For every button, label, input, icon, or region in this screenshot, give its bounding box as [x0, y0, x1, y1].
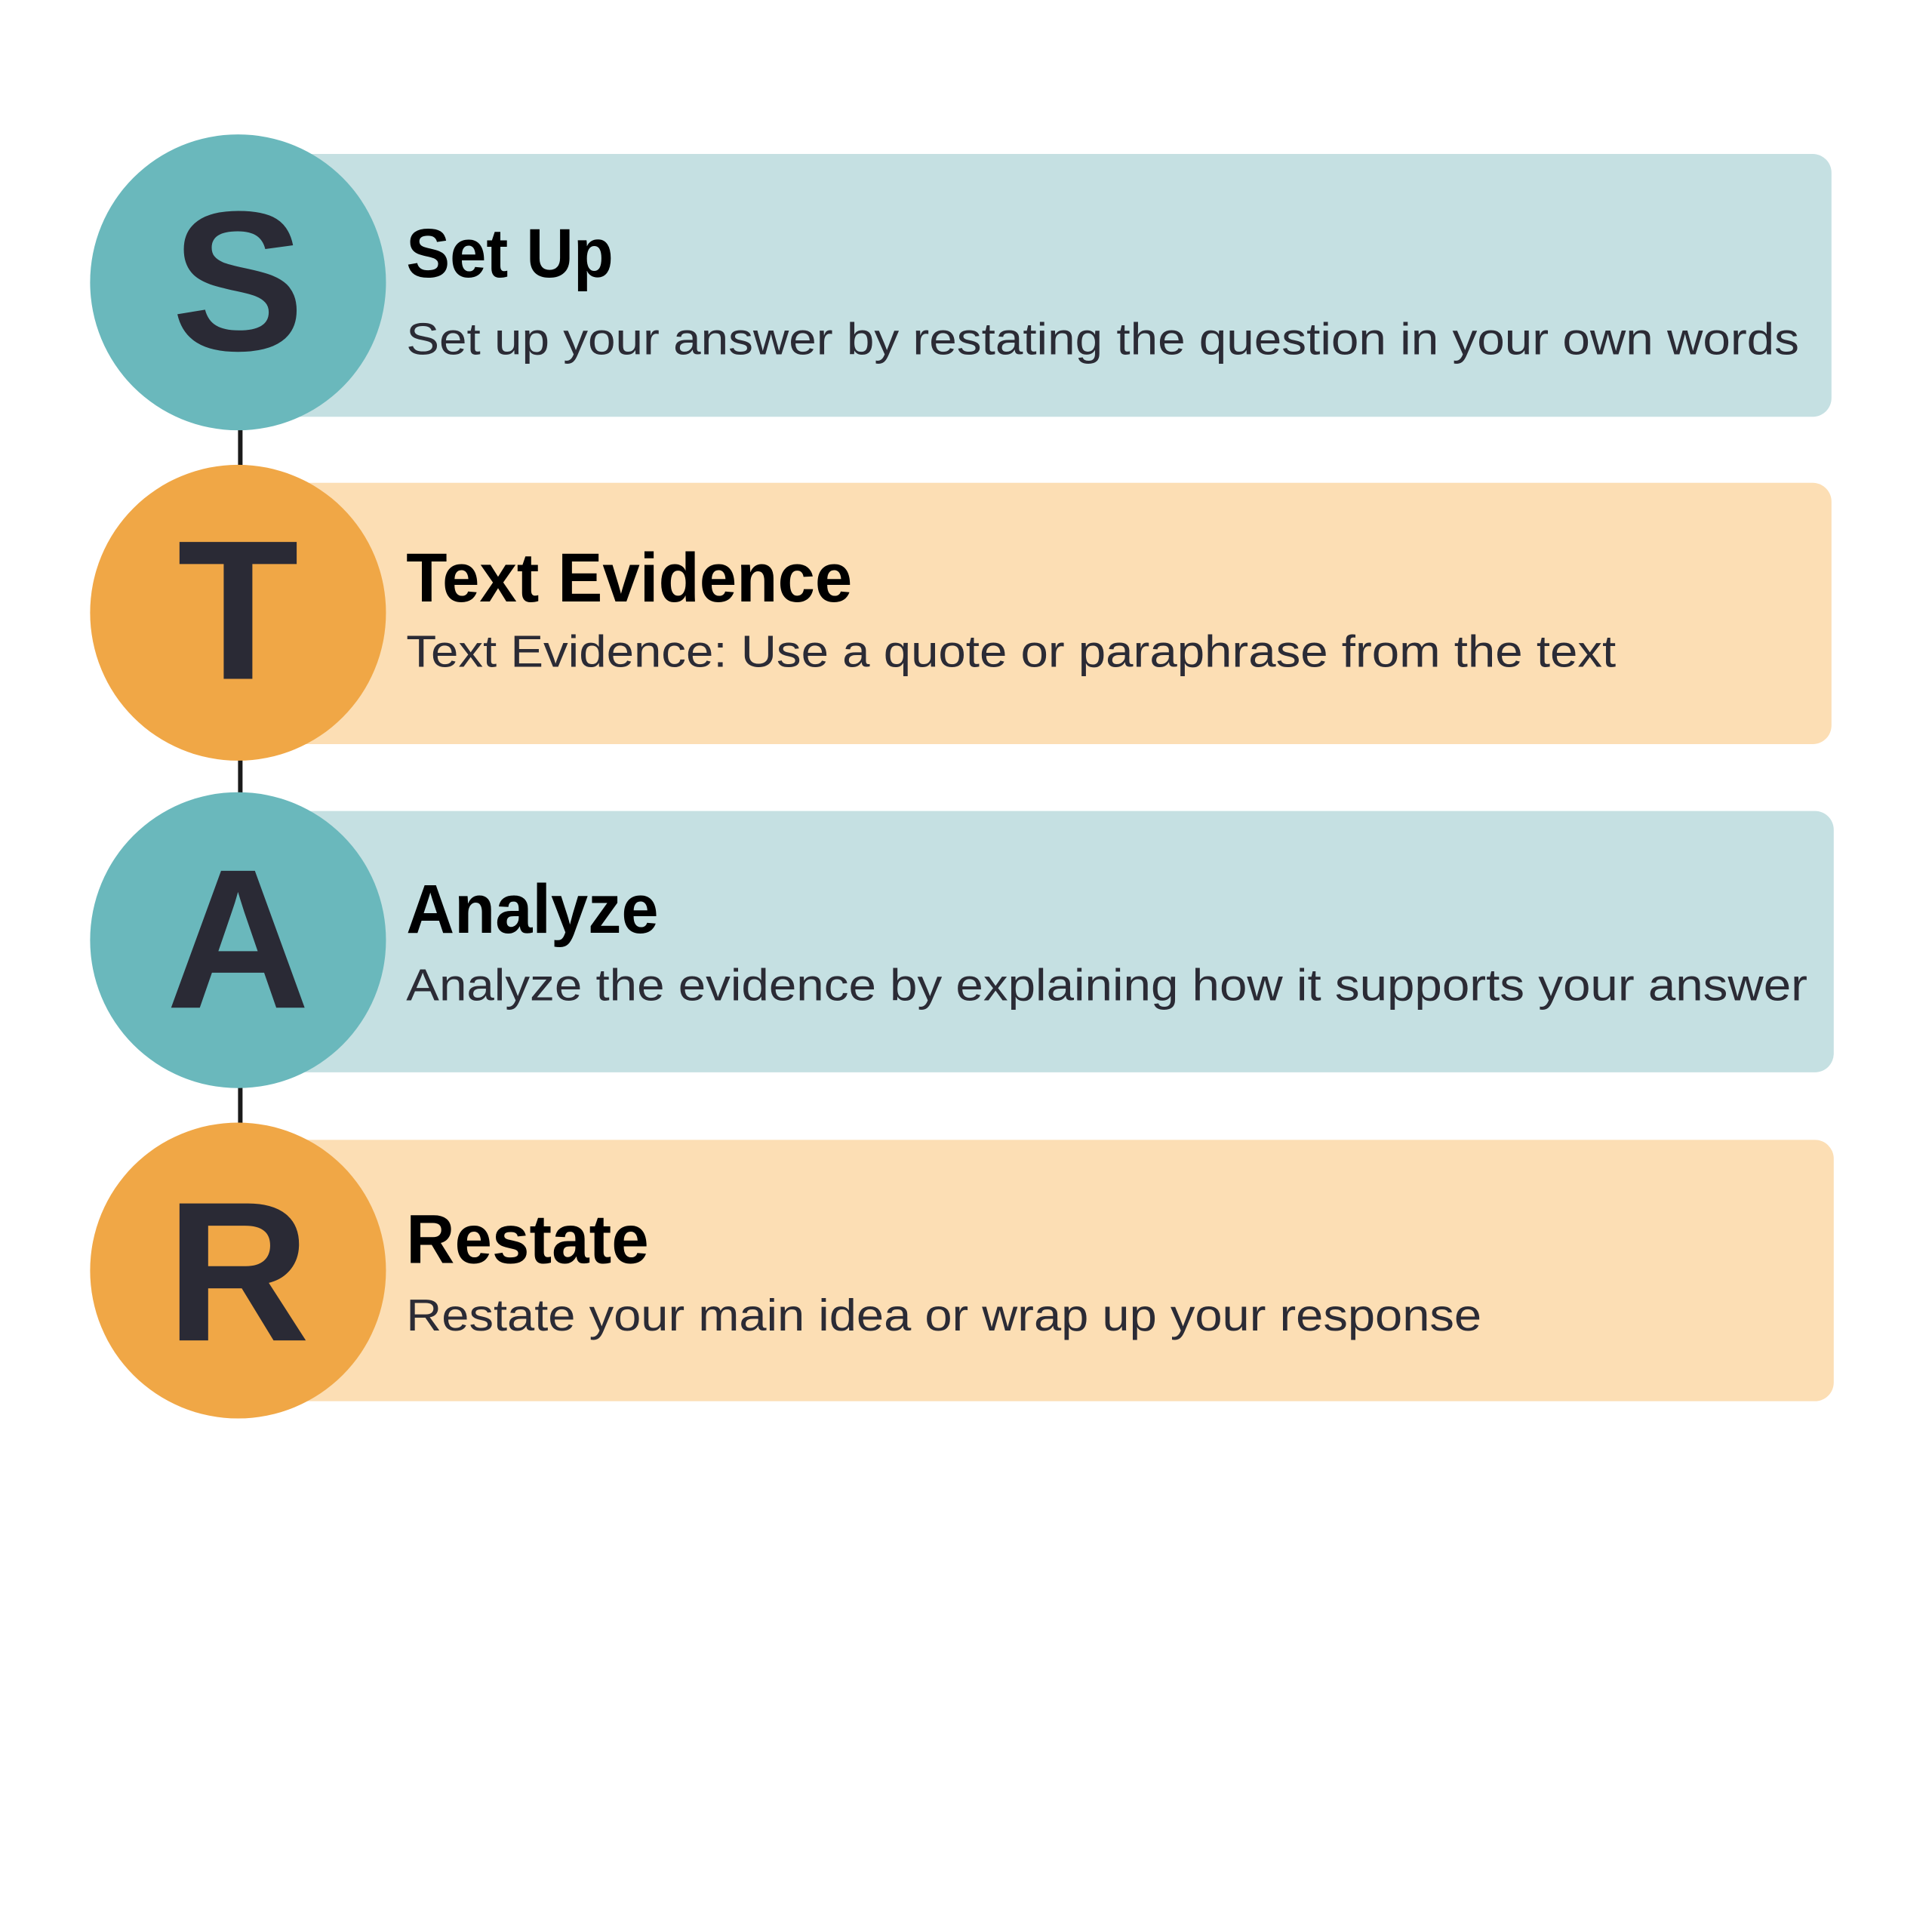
icon: letter A circle: A	[166, 827, 310, 1050]
text: text evidence description: Text Evidence: Use a quote or paraphrase from the text	[406, 626, 1617, 677]
panel: set up	[240, 154, 1832, 417]
icon: letter T circle: T	[177, 498, 299, 721]
icon: letter S circle: S	[171, 170, 304, 392]
heading: Set Up: Set Up	[406, 215, 614, 292]
heading: Analyze: Analyze	[406, 871, 659, 948]
icon: letter R circle: R	[166, 1160, 310, 1383]
heading: Text Evidence: Text Evidence	[406, 540, 852, 617]
icon: letter S circle	[90, 134, 386, 430]
icon: letter T circle	[90, 465, 386, 761]
icon: letter A circle	[90, 792, 386, 1088]
heading: Restate: Restate	[406, 1201, 649, 1278]
panel: restate	[240, 1140, 1834, 1401]
text: analyze description: Analyze the evidence by explaining how it supports your answer	[406, 959, 1807, 1010]
text: set up description: Set up your answer by restating the question in your own words	[406, 314, 1799, 365]
panel: analyze	[240, 811, 1834, 1072]
text: restate description: Restate your main idea or wrap up your response	[406, 1290, 1481, 1340]
icon: letter R circle	[90, 1123, 386, 1419]
panel: text evidence	[240, 483, 1832, 744]
